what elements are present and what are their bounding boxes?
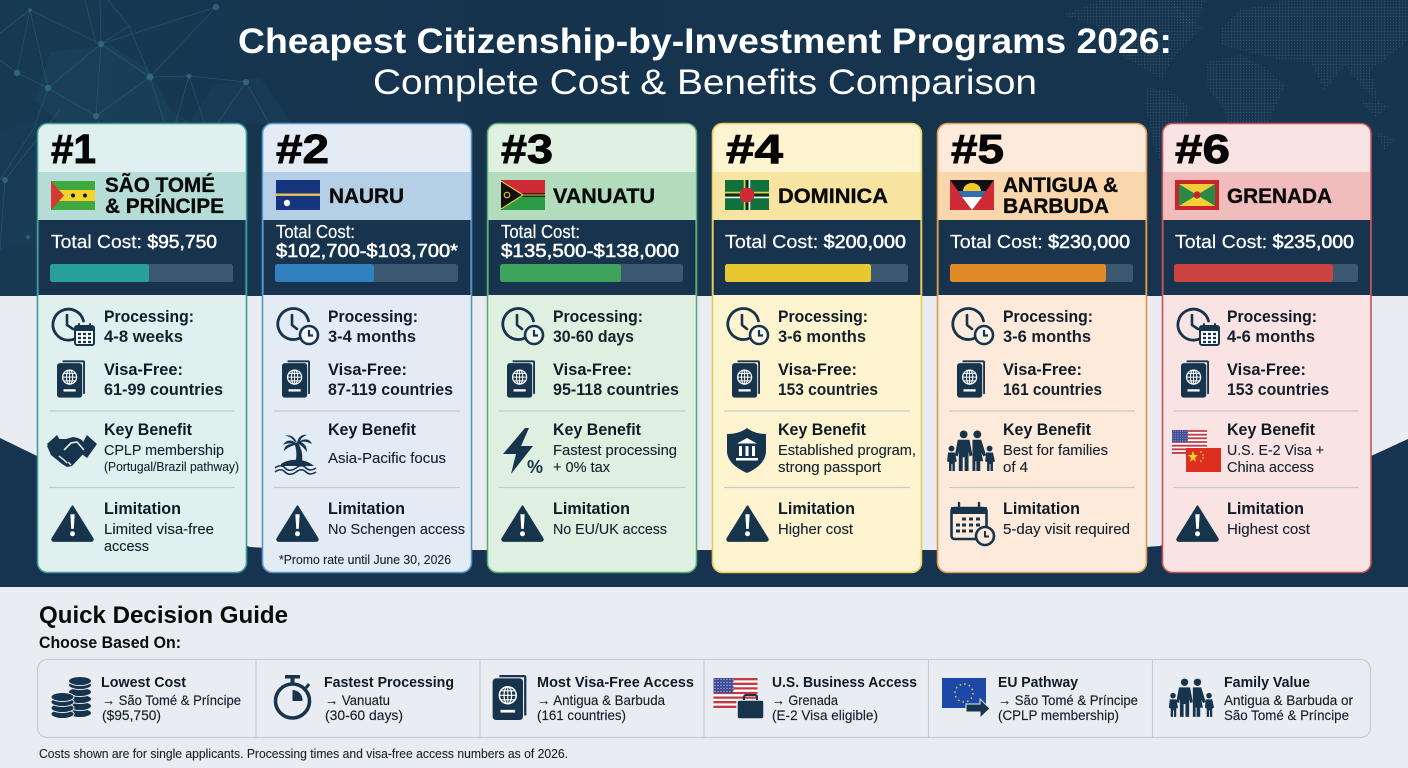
visa-free: 61-99 countries: [104, 381, 223, 399]
panel: #2 Nauru: [262, 124, 472, 572]
fastest processing: (30-60 days): [325, 707, 403, 723]
icon: shield with bank: [727, 428, 766, 473]
visa-free: Visa-Free:: [328, 360, 407, 379]
processing: [778, 307, 868, 346]
flag: Nauru: [276, 180, 320, 210]
visa-free: 87-119 countries: [328, 381, 453, 399]
limitation: Limitation: [328, 499, 405, 518]
promo footnote: *Promo rate until June 30, 2026: [279, 553, 451, 567]
rank: #5: [951, 126, 1004, 172]
icon: family: [1169, 679, 1214, 717]
panel: #3 Vanuatu: [488, 124, 696, 572]
key benefit: [1227, 420, 1324, 476]
country name: & PRÍNCIPE: [105, 195, 224, 218]
limitation: Limitation: [104, 499, 181, 518]
icon: clock and calendar: [1178, 309, 1219, 345]
processing: Processing:: [1003, 307, 1093, 326]
total cost: $135,500-$138,000: [501, 240, 679, 261]
key benefit: China access: [1227, 459, 1314, 476]
rank: #6: [1175, 126, 1230, 172]
country name: DOMINICA: [778, 185, 888, 208]
key benefit: Fastest processing: [553, 442, 677, 459]
icon: clock and calendar: [53, 309, 94, 345]
panel: #4 Dominica: [712, 124, 922, 572]
visa-free: [1227, 360, 1329, 399]
fastest processing: → Vanuatu: [325, 692, 390, 708]
EU pathway: (CPLP membership): [998, 707, 1119, 723]
processing: 4-8 weeks: [104, 328, 183, 346]
limitation: No EU/UK access: [553, 521, 667, 538]
total cost: Total Cost: $235,000: [1175, 231, 1354, 252]
processing: Processing:: [1227, 307, 1317, 326]
limitation: Limitation: [1227, 499, 1304, 518]
flag: Vanuatu: [501, 180, 545, 210]
total cost: $102,700-$103,700*: [276, 240, 458, 261]
most visa-free access: [537, 674, 694, 723]
limitation: Highest cost: [1227, 521, 1311, 538]
icon: warning: [52, 506, 93, 541]
background dotted world map, right: [1063, 0, 1408, 170]
icon: warning: [727, 506, 768, 541]
cost bar: [50, 264, 233, 282]
U.S. business access: → Grenada: [772, 692, 838, 708]
lowest cost: [101, 674, 241, 723]
visa-free: Visa-Free:: [1003, 360, 1082, 379]
flag: São Tomé and Príncipe: [51, 181, 95, 210]
family value: [1224, 674, 1353, 723]
panel: decision guide strip: [38, 660, 1370, 738]
processing: [1003, 307, 1093, 346]
rank: #4: [726, 126, 783, 172]
processing: [553, 307, 643, 346]
processing: Processing:: [104, 307, 194, 326]
processing: [328, 307, 418, 346]
cost bar: [275, 264, 458, 282]
U.S. business access: U.S. Business Access: [772, 674, 917, 691]
total cost: [276, 221, 458, 261]
limitation: access: [104, 538, 149, 555]
key benefit: [328, 420, 446, 467]
icon: clock: [278, 309, 318, 344]
icon: lightning and percent: [503, 428, 543, 477]
flag: Grenada: [1175, 180, 1219, 210]
key benefit: Key Benefit: [104, 420, 192, 439]
most visa-free access: (161 countries): [537, 707, 626, 723]
limitation: [104, 499, 214, 555]
limitation: 5-day visit required: [1003, 521, 1130, 538]
key benefit: (Portugal/Brazil pathway): [104, 460, 239, 474]
icon: passport: [1181, 360, 1209, 398]
key benefit: of 4: [1003, 459, 1028, 476]
key benefit: Asia-Pacific focus: [328, 450, 446, 467]
limitation: [553, 499, 667, 538]
limitation: [778, 499, 855, 538]
icon: clock: [953, 309, 993, 344]
title: Cheapest Citizenship-by-Investment Programs 2026:: [238, 22, 1172, 61]
country name: [1003, 174, 1118, 218]
key benefit: Key Benefit: [328, 420, 416, 439]
panel: #6 Grenada: [1162, 124, 1371, 572]
visa-free: Visa-Free:: [104, 360, 183, 379]
icon: clock: [728, 309, 768, 344]
visa-free: Visa-Free:: [1227, 360, 1306, 379]
family value: São Tomé & Príncipe: [1224, 707, 1349, 723]
icon: clock: [503, 309, 543, 344]
rank: #1: [51, 126, 96, 172]
EU pathway: → São Tomé & Príncipe: [998, 692, 1138, 708]
most visa-free access: → Antigua & Barbuda: [537, 692, 665, 708]
U.S. business access: (E-2 Visa eligible): [772, 707, 878, 723]
country name: VANUATU: [553, 185, 655, 208]
rank: #2: [276, 126, 329, 172]
key benefit: Key Benefit: [553, 420, 641, 439]
visa-free: 95-118 countries: [553, 381, 679, 399]
key benefit: [1003, 420, 1108, 476]
visa-free: 153 countries: [1227, 381, 1329, 399]
total cost: [501, 221, 679, 261]
panel: #1 São Tomé & Príncipe: [38, 124, 246, 572]
flag: Antigua and Barbuda: [950, 180, 994, 210]
key benefit: CPLP membership: [104, 442, 224, 459]
cost bar: [1174, 264, 1358, 282]
icon: passport: [282, 360, 310, 398]
processing: Processing:: [328, 307, 418, 326]
lowest cost: → São Tomé & Príncipe: [102, 692, 241, 708]
lowest cost: ($95,750): [102, 707, 161, 723]
visa-free: 161 countries: [1003, 381, 1102, 399]
lowest cost: Lowest Cost: [101, 674, 186, 691]
country name: NAURU: [329, 185, 404, 208]
processing: 30-60 days: [553, 328, 634, 346]
icon: handshake: [47, 435, 97, 467]
limitation: Limitation: [1003, 499, 1080, 518]
icon: lightning and percent: %: [527, 457, 543, 477]
key benefit: U.S. E-2 Visa +: [1227, 442, 1324, 459]
heading: Quick Decision Guide: Quick Decision Guide: [39, 602, 288, 629]
country name: ANTIGUA &: [1003, 174, 1118, 197]
limitation: Higher cost: [778, 521, 854, 538]
icon: coin stacks: [51, 676, 92, 718]
limitation: Limited visa-free: [104, 521, 214, 538]
icon: calendar and clock: [951, 503, 994, 545]
key benefit: [778, 420, 916, 476]
total cost: Total Cost:: [276, 221, 355, 242]
family value: Family Value: [1224, 674, 1310, 691]
key benefit: strong passport: [778, 459, 882, 476]
key benefit: Key Benefit: [778, 420, 866, 439]
title: Complete Cost & Benefits Comparison: [373, 63, 1037, 102]
visa-free: [553, 360, 679, 399]
processing: [104, 307, 194, 346]
limitation: Limitation: [553, 499, 630, 518]
total cost: Total Cost:: [501, 221, 580, 242]
key benefit: + 0% tax: [553, 459, 610, 476]
icon: passport: [507, 360, 535, 398]
rank: #3: [501, 126, 553, 172]
cost bar: [500, 264, 683, 282]
icon: palm island: [275, 435, 316, 474]
total cost: Total Cost: $200,000: [725, 231, 906, 252]
cost bar: [950, 264, 1133, 282]
title: [238, 22, 1172, 102]
key benefit: Best for families: [1003, 442, 1108, 459]
EU pathway: [998, 674, 1138, 723]
icon: family: [947, 430, 995, 471]
fastest processing: [324, 674, 454, 723]
limitation: Limitation: [778, 499, 855, 518]
visa-free: 153 countries: [778, 381, 878, 399]
icon: passport: [732, 360, 760, 398]
processing: 3-4 months: [328, 328, 416, 346]
country name: GRENADA: [1227, 185, 1332, 208]
cost bar: [725, 264, 908, 282]
limitation: [1227, 499, 1311, 538]
visa-free: [1003, 360, 1102, 399]
limitation: [328, 499, 465, 538]
icon: passport: [493, 675, 526, 720]
icon: warning: [277, 506, 318, 541]
visa-free: [328, 360, 453, 399]
key benefit: Established program,: [778, 442, 916, 459]
visa-free: Visa-Free:: [778, 360, 857, 379]
flag: Dominica: [725, 180, 769, 210]
processing: 4-6 months: [1227, 328, 1315, 346]
visa-free: [104, 360, 223, 399]
processing: [1227, 307, 1317, 346]
icon: stopwatch: [276, 675, 310, 718]
total cost: Total Cost: $230,000: [950, 231, 1130, 252]
fastest processing: Fastest Processing: [324, 674, 454, 691]
most visa-free access: Most Visa-Free Access: [537, 674, 694, 691]
processing: 3-6 months: [1003, 328, 1091, 346]
family value: Antigua & Barbuda or: [1224, 692, 1353, 708]
key benefit: [553, 420, 677, 476]
country name: SÃO TOMÉ: [105, 174, 215, 197]
icon: EU flag and arrow: [942, 678, 990, 718]
icon: warning: [1177, 506, 1218, 541]
limitation: [1003, 499, 1130, 538]
icon: passport: [57, 360, 85, 398]
visa-free: Visa-Free:: [553, 360, 632, 379]
processing: Processing:: [778, 307, 868, 326]
key benefit: [104, 420, 239, 474]
background network and landmass, left: [0, 0, 290, 250]
processing: Processing:: [553, 307, 643, 326]
footnote: Costs shown are for single applicants. Processing times and visa-free access numbers as of 2026.: [39, 746, 568, 761]
EU pathway: EU Pathway: [998, 674, 1079, 691]
icon: passport: [957, 360, 985, 398]
processing: 3-6 months: [778, 328, 866, 346]
icon: warning: [502, 506, 543, 541]
panel: #5 Antigua & Barbuda: [938, 124, 1146, 572]
total cost: Total Cost: $95,750: [51, 231, 217, 252]
country name: BARBUDA: [1003, 195, 1109, 218]
limitation: No Schengen access: [328, 521, 465, 538]
country name: [105, 174, 224, 218]
U.S. business access: [772, 674, 917, 723]
key benefit: Key Benefit: [1003, 420, 1091, 439]
subheading: Choose Based On: Choose Based On:: [39, 633, 181, 652]
icon: US and China flags: [1172, 430, 1221, 472]
key benefit: Key Benefit: [1227, 420, 1315, 439]
icon: US flag and briefcase: [714, 678, 764, 719]
visa-free: [778, 360, 878, 399]
